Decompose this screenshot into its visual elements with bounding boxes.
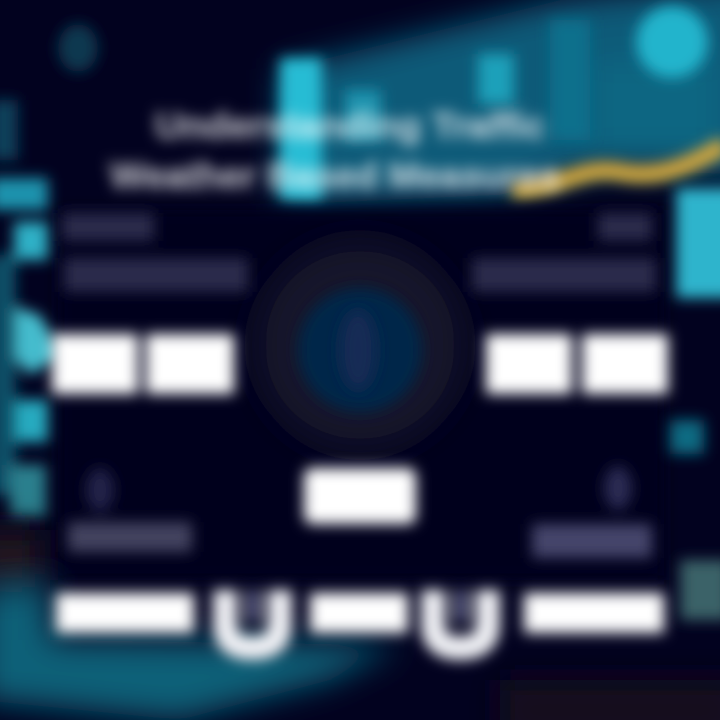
panel: lower right label [532, 466, 652, 558]
line: gold trend streak [512, 145, 720, 190]
footer: white connector strip [56, 590, 664, 648]
backdrop: top right teal glow [280, 0, 720, 205]
panel: central circle [255, 240, 465, 450]
bar chart: cyan bars behind the title [280, 20, 590, 200]
panel: left white block [52, 334, 234, 394]
center icon [340, 310, 376, 390]
panel: center white block [304, 468, 416, 524]
title [110, 105, 560, 196]
title: Understanding Traffic [155, 105, 545, 146]
icon: faint top left marker [58, 24, 98, 72]
backdrop: bottom teal glow [0, 530, 720, 720]
inner disc [298, 288, 422, 412]
icon: bright cyan circle [636, 6, 708, 78]
backdrop: navy content panel [58, 210, 664, 580]
right edge: cyan strip [670, 188, 720, 620]
panel: lower left label [68, 468, 192, 552]
panel: upper left text [62, 213, 248, 292]
outer ring [255, 240, 465, 450]
panel: upper right text [472, 213, 656, 292]
panel: right white block [486, 334, 668, 394]
title: Weather Based Measures [110, 155, 560, 196]
left edge: cyan strip [0, 100, 62, 517]
